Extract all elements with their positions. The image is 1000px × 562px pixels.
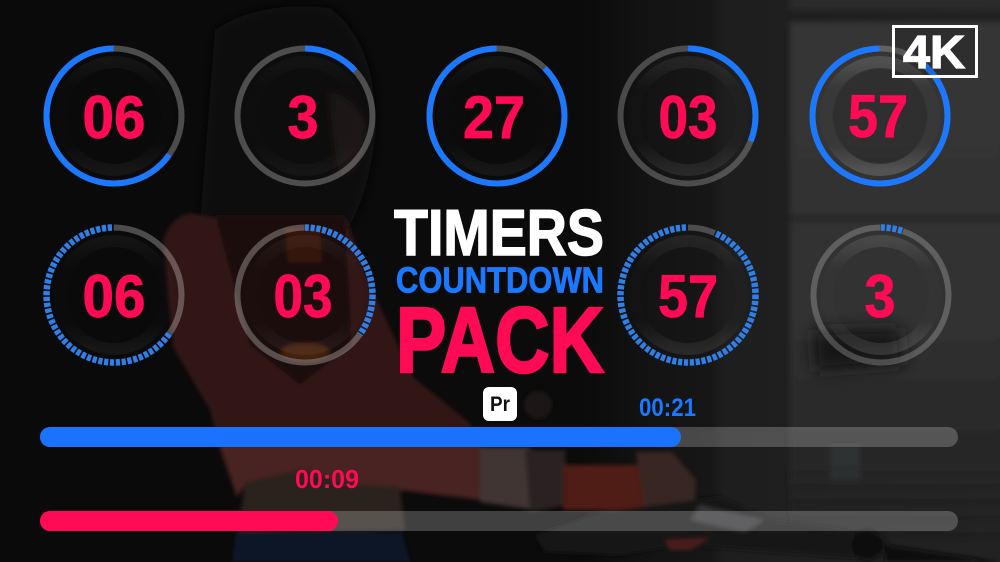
timer ring: 06 solid: 06 [82, 84, 146, 151]
timer ring: 03 dotted [234, 224, 376, 366]
progress bar: pink 00:09 [40, 464, 958, 531]
title: TIMERS COUNTDOWN PACK: PACK [396, 288, 604, 392]
timer ring: 03 solid [620, 48, 756, 184]
progress bar: blue 00:21: 00:21 [639, 394, 696, 422]
timer ring: 57 dotted [620, 228, 756, 362]
timer ring: 57 dotted: 57 [658, 263, 718, 330]
progress bar: blue 00:21 [40, 394, 958, 447]
icon: Premiere Pro badge: Pr [490, 393, 510, 416]
midriff [238, 470, 405, 533]
title: TIMERS COUNTDOWN PACK [394, 196, 604, 392]
timer ring: 03 solid: 03 [658, 84, 718, 151]
title: TIMERS COUNTDOWN PACK: TIMERS [394, 196, 604, 269]
timer ring: 27 solid: 27 [463, 84, 525, 151]
progress bar: pink 00:09: 00:09 [295, 464, 359, 494]
timer ring: 3 dotted [810, 224, 952, 366]
pants [232, 533, 410, 562]
timer ring: 3 solid [238, 48, 372, 184]
timer ring: 06 dotted [46, 228, 182, 362]
badge: 4K: 4K [903, 26, 965, 78]
hand and gloves [480, 447, 535, 510]
shadowed hair and chest [215, 215, 352, 385]
sleeve, shoulder and torso [163, 213, 480, 500]
timer ring: 57 solid [785, 21, 975, 211]
timer ring: 3 dotted: 3 [864, 263, 896, 330]
title: TIMERS COUNTDOWN PACK: COUNTDOWN [396, 260, 604, 300]
timer ring: 57 solid: 57 [848, 83, 908, 150]
timer ring: 06 dotted: 06 [82, 263, 146, 330]
timer ring: 3 solid: 3 [288, 84, 318, 151]
cable machine [535, 497, 895, 558]
icon: Premiere Pro badge [483, 387, 517, 421]
timer ring: 06 solid [20, 22, 208, 210]
timer ring: 27 solid [402, 21, 592, 211]
forearm [218, 432, 485, 500]
timer ring: 03 dotted: 03 [274, 263, 332, 330]
